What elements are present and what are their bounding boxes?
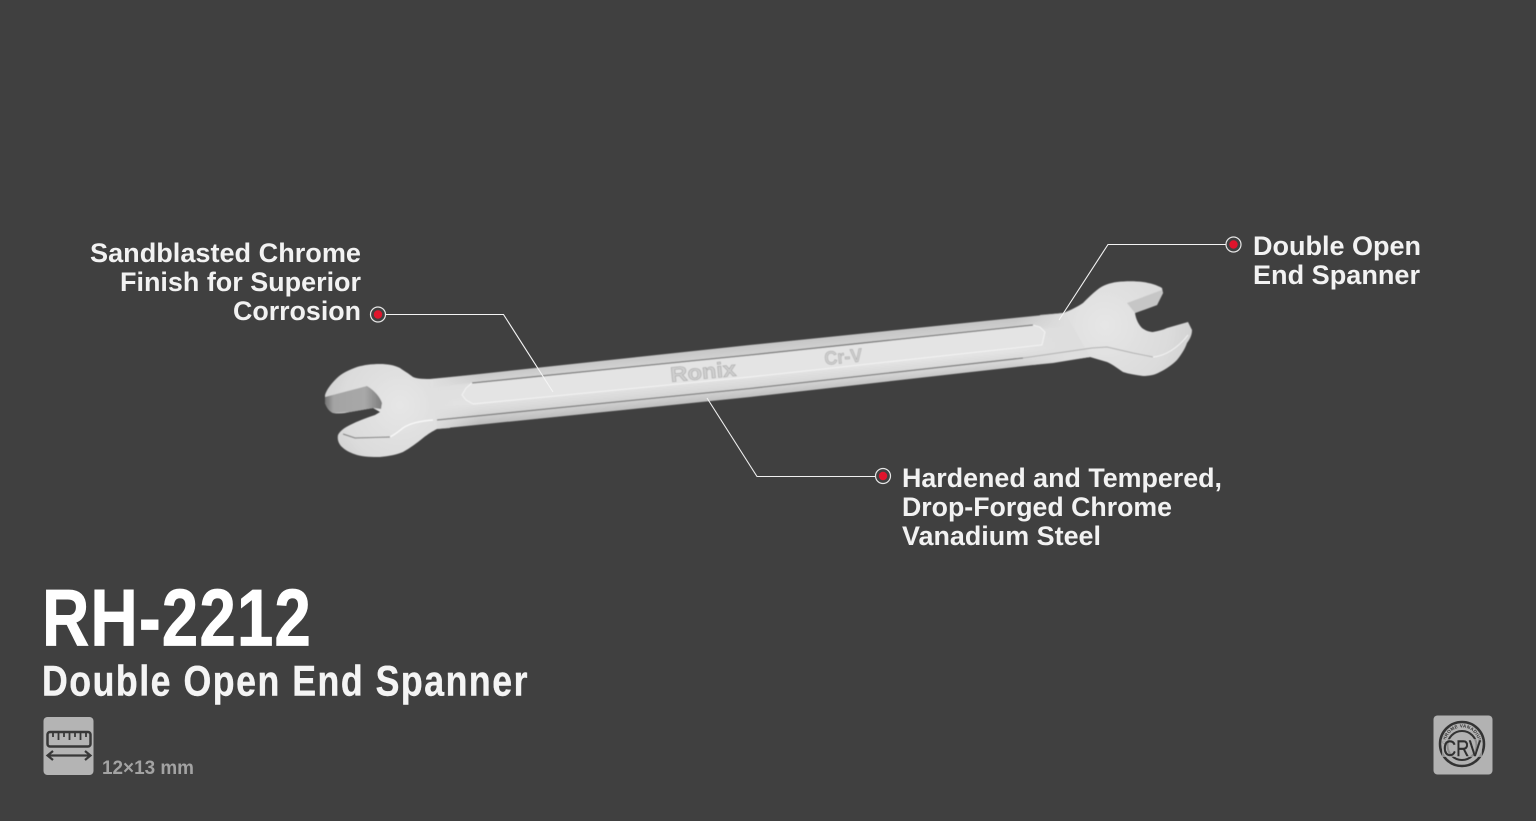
upper groove [472, 325, 1033, 383]
left jaw inner face [325, 386, 382, 413]
marker dot [876, 468, 890, 484]
spanner shaft [433, 313, 1090, 429]
callout text: Finish for Superior [120, 267, 361, 297]
callout text: End Spanner [1253, 260, 1420, 290]
leader line [385, 314, 553, 392]
right neck blend [1015, 313, 1090, 367]
right jaw highlight [1153, 335, 1188, 357]
callout: double open end spanner [1059, 231, 1429, 320]
left open-end head [325, 364, 450, 457]
callout text: Hardened and Tempered, [902, 463, 1222, 493]
right rim line [1023, 347, 1153, 358]
callout text: Corrosion [233, 296, 361, 326]
callout text: Double Open [1253, 231, 1421, 261]
icon: ruler size [44, 717, 94, 775]
icon: chrome vanadium badge: CHROME VANADIUM [1442, 724, 1482, 744]
callout text: Vanadium Steel [902, 521, 1101, 551]
lower groove [437, 358, 1023, 420]
title: model number: RH-2212 [42, 572, 311, 663]
right jaw inner face [1127, 290, 1163, 313]
central flat panel [462, 325, 1045, 404]
spanner illustration [325, 281, 1192, 457]
panel edge line [462, 325, 1045, 404]
callout text: Drop-Forged Chrome [902, 492, 1172, 522]
size text: 12×13 mm [102, 758, 194, 779]
marker dot [370, 307, 386, 322]
left neck blend [430, 374, 484, 429]
leader line [707, 398, 876, 476]
marker dot [1226, 237, 1241, 252]
stamped Ronix mark: Ronix [669, 358, 738, 387]
icon: chrome vanadium badge: CRV [1443, 736, 1481, 761]
right open-end head [1033, 281, 1192, 376]
leader line [1059, 244, 1226, 320]
stamped Cr-V mark: Cr-V [823, 345, 864, 370]
callout: hardened and tempered [707, 398, 1230, 551]
left jaw rim line [343, 434, 390, 438]
icon: chrome vanadium badge [1434, 716, 1492, 774]
subtitle: product name: Double Open End Spanner [42, 658, 528, 705]
callout: sandblasted chrome finish [90, 238, 553, 392]
callout text: Sandblasted Chrome [90, 238, 361, 268]
left jaw highlight [390, 420, 433, 437]
